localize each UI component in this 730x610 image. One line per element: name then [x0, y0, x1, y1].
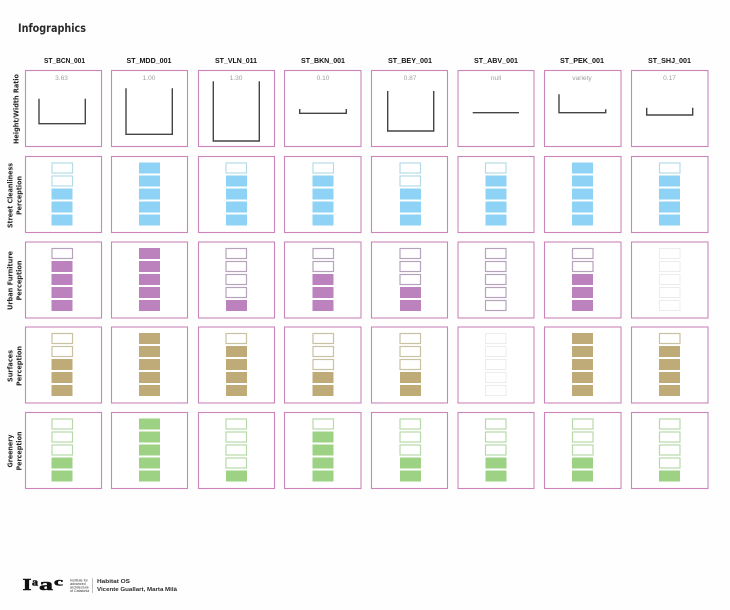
section panel: SHJ 0.17 [632, 70, 708, 146]
surfaces panel: SHJ 4 of 5 [632, 327, 708, 403]
street cleanliness panel: BCN 3 of 5 [26, 156, 102, 232]
greenery panel: BCN 2 of 5 [26, 412, 102, 488]
section panel: BCN 3.63 [26, 70, 102, 146]
row label: greenery perception: Perception [16, 431, 24, 470]
footer credits: Habitat OS [97, 579, 130, 585]
section panel: VLN 1.30 [198, 70, 274, 146]
section panel: MDD 1.00: 1.00 [143, 75, 156, 82]
section panel: MDD 1.00 [112, 70, 188, 146]
footer logo: IaaC: c [54, 574, 64, 588]
section panel: BEY 0.87 [372, 70, 448, 146]
footer logo: IaaC: a [39, 575, 54, 594]
surfaces panel: BKN 2 of 5 [284, 327, 361, 403]
column headers: ST_BKN_001 [301, 56, 346, 65]
surfaces panel: PEK 5 of 5 [544, 327, 621, 403]
footer logo: IaaC: a [32, 578, 39, 588]
urban furniture panel: SHJ no data [632, 242, 708, 318]
row label: height/width ratio: Height/Width Ratio [12, 74, 20, 144]
greenery panel: PEK 2 of 5 [544, 412, 621, 488]
urban furniture panel: BKN 3 of 5 [284, 242, 361, 318]
greenery panel: BKN 4 of 5 [284, 412, 361, 488]
surfaces panel: BCN 3 of 5 [26, 327, 102, 403]
footer institute text: Institute for [70, 578, 89, 582]
footer institute text: advanced [70, 582, 86, 586]
footer institute text: of Catalonia [70, 589, 89, 593]
urban furniture panel: BCN 4 of 5 [26, 242, 102, 318]
urban furniture panel: MDD 5 of 5 [112, 242, 188, 318]
row label: greenery perception: Greenery [6, 434, 14, 468]
section panel: VLN 1.30: 1.30 [230, 75, 243, 82]
section panel: SHJ 0.17: 0.17 [663, 75, 676, 82]
street cleanliness panel: VLN 4 of 5 [198, 156, 274, 232]
footer institute text [70, 578, 89, 593]
column headers: ST_MDD_001 [126, 56, 172, 65]
street cleanliness panel: PEK 5 of 5 [544, 156, 621, 232]
section panel: ABV null: null [491, 75, 502, 82]
section panel: BKN 0.10 [284, 70, 361, 146]
section panel: BKN 0.10: 0.10 [317, 75, 330, 82]
column headers: ST_BEY_001 [388, 56, 433, 65]
urban furniture panel: ABV 0 of 5 [458, 242, 534, 318]
row label: urban furniture perception: Urban Furniture [6, 251, 14, 310]
title: Infographics [18, 21, 86, 35]
row label: surfaces perception [6, 346, 24, 386]
column headers: ST_SHJ_001 [648, 56, 692, 65]
urban furniture panel: VLN 1 of 5 [198, 242, 274, 318]
section panel: BCN 3.63: 3.63 [55, 75, 68, 82]
footer institute text: architecture [70, 586, 89, 590]
footer credits: Vicente Guallart, Marta Milà [97, 587, 178, 593]
column headers [44, 56, 692, 65]
greenery panel: VLN 1 of 5 [198, 412, 274, 488]
urban furniture panel: PEK 3 of 5 [544, 242, 621, 318]
surfaces panel: ABV no data [458, 327, 534, 403]
surfaces panel: BEY 2 of 5 [372, 327, 448, 403]
row label: street cleanliness perception: Street Cleanliness [6, 163, 14, 228]
column headers: ST_PEK_001 [560, 56, 605, 65]
greenery panel: SHJ 1 of 5 [632, 412, 708, 488]
section panel: PEK variety [544, 70, 621, 146]
section panel: ABV null [458, 70, 534, 146]
street cleanliness panel: SHJ 4 of 5 [632, 156, 708, 232]
greenery panel: BEY 2 of 5 [372, 412, 448, 488]
street cleanliness panel: MDD 5 of 5 [112, 156, 188, 232]
row label: urban furniture perception: Perception [16, 260, 24, 300]
street cleanliness panel: BKN 4 of 5 [284, 156, 361, 232]
footer credits [97, 579, 178, 593]
row label: surfaces perception: Surfaces [6, 350, 14, 382]
section panel: PEK variety: variety [572, 75, 592, 82]
column headers: ST_ABV_001 [474, 56, 519, 65]
urban furniture panel: BEY 2 of 5 [372, 242, 448, 318]
surfaces panel: VLN 4 of 5 [198, 327, 274, 403]
row label: street cleanliness perception [6, 163, 24, 228]
section panel: BEY 0.87: 0.87 [404, 75, 417, 82]
footer logo: IaaC [22, 574, 64, 594]
street cleanliness panel: BEY 3 of 5 [372, 156, 448, 232]
greenery panel: ABV 2 of 5 [458, 412, 534, 488]
row label: urban furniture perception [6, 251, 24, 310]
surfaces panel: MDD 5 of 5 [112, 327, 188, 403]
row label: street cleanliness perception: Perception [16, 176, 24, 215]
greenery panel: MDD 5 of 5 [112, 412, 188, 488]
column headers: ST_BCN_001 [44, 56, 86, 65]
footer logo: IaaC: I [22, 575, 32, 594]
row label: greenery perception [6, 431, 24, 470]
row label: surfaces perception: Perception [16, 346, 24, 386]
column headers: ST_VLN_011 [215, 56, 258, 65]
street cleanliness panel: ABV 4 of 5 [458, 156, 534, 232]
